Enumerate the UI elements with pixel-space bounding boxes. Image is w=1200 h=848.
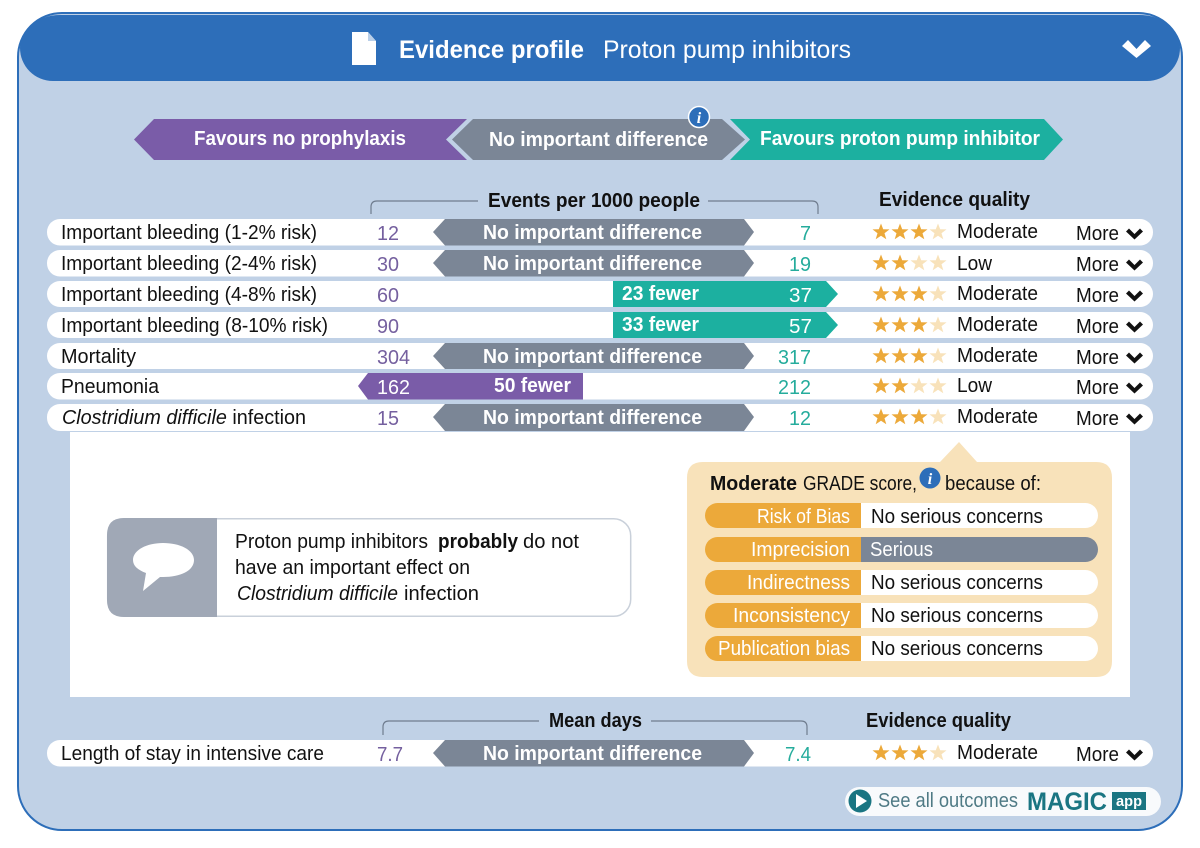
row: Clostridium difficile: Clostridium difficile infection <box>62 407 306 429</box>
GRADE row: risk of bias: Risk of Bias <box>757 506 850 528</box>
callout: plain language summary <box>107 518 631 617</box>
mean days column heading <box>383 710 807 735</box>
header bar <box>20 15 1180 81</box>
row: Clostridium difficile: Moderate <box>957 406 1038 428</box>
row: pneumonia: More <box>1076 377 1119 399</box>
GRADE row: inconsistency: No serious concerns <box>871 605 1043 627</box>
legend: favours proton pump inhibitor <box>730 119 1063 160</box>
GRADE row: risk of bias <box>705 503 1098 528</box>
row: length of stay: 7.4 <box>785 744 811 766</box>
row: bleeding 2-4% <box>47 250 1153 276</box>
row: bleeding 2-4%: 19 <box>789 254 811 276</box>
legend: no important difference: No important difference <box>489 129 708 151</box>
row: bleeding 8-10%: 33 fewer <box>622 314 699 336</box>
row: bleeding 8-10%: Moderate <box>957 314 1038 336</box>
GRADE row: indirectness: No serious concerns <box>871 572 1043 594</box>
evidence quality heading: Evidence quality <box>879 189 1031 211</box>
row: bleeding 4-8%: 23 fewer <box>622 283 699 305</box>
row: Clostridium difficile: 12 <box>789 408 811 430</box>
GRADE title: i <box>928 471 933 488</box>
row: bleeding 8-10%: 90 <box>377 316 399 338</box>
row: bleeding 1-2%: 7 <box>800 223 811 245</box>
GRADE row: publication bias <box>705 636 1098 661</box>
GRADE title <box>710 468 1041 495</box>
MAGIC app logo: app <box>1116 793 1142 810</box>
row: mortality: Mortality <box>61 346 136 368</box>
GRADE row: inconsistency <box>705 603 1098 628</box>
GRADE row: risk of bias: No serious concerns <box>871 506 1043 528</box>
row: bleeding 2-4%: No important difference <box>483 253 702 275</box>
header subtitle: Proton pump inhibitors <box>603 36 851 64</box>
row: Clostridium difficile: 15 <box>377 408 399 430</box>
row: mortality: More <box>1076 347 1119 369</box>
MAGIC app logo: MAGIC <box>1027 788 1107 816</box>
row: pneumonia: Pneumonia <box>61 376 160 398</box>
row: bleeding 1-2%: 12 <box>377 223 399 245</box>
row: bleeding 8-10%: 57 <box>789 316 812 338</box>
callout text: infection <box>404 583 479 605</box>
icon: play button <box>848 790 872 812</box>
icon: collapse chevron <box>1122 40 1151 58</box>
see all outcomes link: See all outcomes <box>878 790 1018 812</box>
header title: Evidence profile <box>399 36 584 64</box>
row: bleeding 4-8%: Important bleeding (4-8% risk) <box>61 284 317 306</box>
row: bleeding 2-4%: Important bleeding (2-4% risk) <box>61 253 317 275</box>
GRADE row: publication bias: No serious concerns <box>871 638 1043 660</box>
row: Clostridium difficile: More <box>1076 408 1119 430</box>
row: length of stay: Length of stay in intensive care <box>61 743 324 765</box>
GRADE row: indirectness: Indirectness <box>747 572 850 594</box>
callout text: Proton pump inhibitors <box>235 531 428 553</box>
GRADE title: Moderate <box>710 473 797 495</box>
icon: info: i <box>697 110 702 127</box>
row: mortality: Moderate <box>957 345 1038 367</box>
legend: favours proton pump inhibitor: Favours proton pump inhibitor <box>760 128 1040 150</box>
row: bleeding 1-2%: More <box>1076 223 1119 245</box>
GRADE row: publication bias: Publication bias <box>718 638 850 660</box>
mean days column heading: Mean days <box>549 710 642 732</box>
row: pneumonia: 212 <box>778 377 811 399</box>
row: bleeding 8-10%: More <box>1076 316 1119 338</box>
GRADE row: imprecision <box>705 537 1098 562</box>
GRADE row: indirectness <box>705 570 1098 595</box>
callout text: probably <box>438 531 519 553</box>
row: bleeding 1-2%: Important bleeding (1-2% risk) <box>61 222 317 244</box>
legend: no important difference <box>452 119 745 160</box>
row: mortality: 304 <box>377 347 410 369</box>
GRADE row: imprecision: Serious <box>870 539 933 561</box>
row: bleeding 4-8%: Moderate <box>957 283 1038 305</box>
expanded detail panel <box>70 432 1130 697</box>
row: bleeding 4-8% <box>47 281 1153 307</box>
row: pneumonia: 162 <box>377 377 410 399</box>
row: mortality: No important difference <box>483 346 702 368</box>
callout text: have an important effect on <box>235 557 470 579</box>
row: bleeding 2-4%: Low <box>957 253 993 275</box>
legend arrows <box>134 106 1063 160</box>
row: bleeding 1-2% <box>47 219 1153 246</box>
icon: speech bubble <box>133 543 194 591</box>
row: bleeding 2-4%: 30 <box>377 254 399 276</box>
see all outcomes link <box>845 787 1161 816</box>
row: length of stay <box>47 740 1153 766</box>
GRADE title: GRADE score, <box>803 473 917 495</box>
row: pneumonia <box>47 373 1153 400</box>
row: mortality <box>47 343 1153 369</box>
icon: document <box>352 32 376 65</box>
row: length of stay: No important difference <box>483 743 702 765</box>
row: length of stay: More <box>1076 744 1119 766</box>
row: length of stay: Moderate <box>957 742 1038 764</box>
row: bleeding 2-4%: More <box>1076 254 1119 276</box>
row: bleeding 1-2%: No important difference <box>483 222 702 244</box>
legend: favours no prophylaxis <box>134 119 467 160</box>
evidence quality heading (lower): Evidence quality <box>866 710 1012 732</box>
row: pneumonia: Low <box>957 375 993 397</box>
row: bleeding 4-8%: More <box>1076 285 1119 307</box>
row: length of stay: 7.7 <box>377 744 403 766</box>
callout text <box>235 531 579 605</box>
events column heading <box>371 190 818 214</box>
legend: favours no prophylaxis: Favours no prophylaxis <box>194 128 406 150</box>
row: mortality: 317 <box>778 347 811 369</box>
events column heading: Events per 1000 people <box>488 190 700 212</box>
icon: info <box>688 106 710 128</box>
row: bleeding 1-2%: Moderate <box>957 221 1038 243</box>
GRADE score panel <box>687 442 1112 677</box>
row: bleeding 4-8%: 60 <box>377 285 399 307</box>
callout text: Clostridium difficile <box>237 583 398 605</box>
row: Clostridium difficile <box>47 404 1153 431</box>
row: bleeding 4-8%: 37 <box>789 285 812 307</box>
callout text: do not <box>523 531 579 553</box>
GRADE row: inconsistency: Inconsistency <box>733 605 850 627</box>
GRADE row: imprecision: Imprecision <box>751 539 850 561</box>
row: bleeding 8-10%: Important bleeding (8-10% risk) <box>61 315 328 337</box>
GRADE title: because of: <box>945 473 1041 495</box>
row: Clostridium difficile: No important difference <box>483 407 702 429</box>
row: bleeding 8-10% <box>47 312 1153 338</box>
row: pneumonia: 50 fewer <box>494 375 571 397</box>
